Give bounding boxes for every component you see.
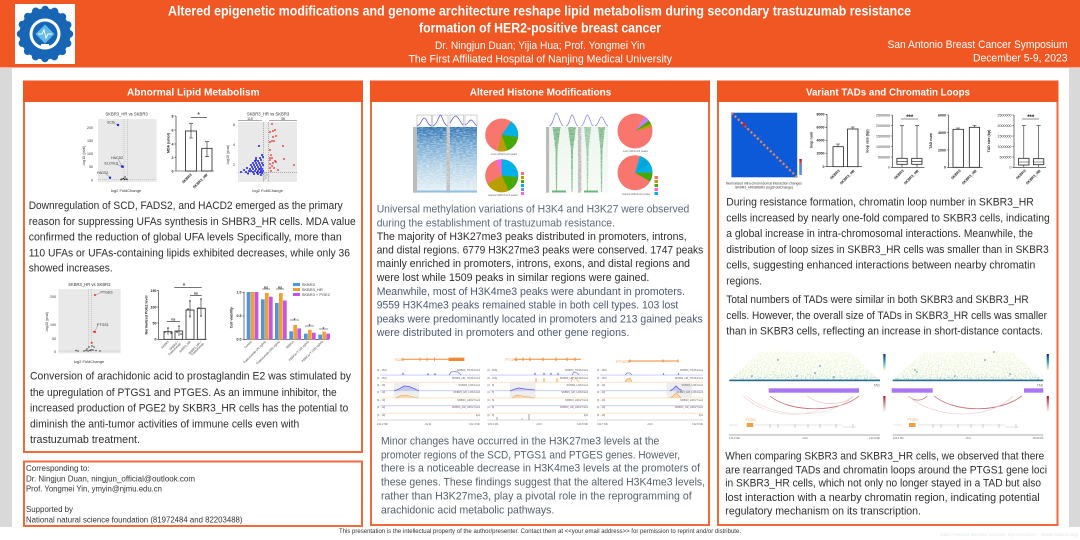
box plot: TAD size: 2000000 (998, 124, 1012, 128)
volcano plot: UFA lipids: -log10 (pval) (226, 145, 230, 165)
text block: methylation variations: Universal methylation variations of H3K4 and H3K27 were observed (377, 204, 689, 216)
volcano plot: lipid genes: 200 (87, 126, 93, 130)
text block: prostaglandin: Conversion of arachidonic acid to prostaglandin E2 was stimulated by (30, 371, 351, 383)
panel: variant TADs and chromatin loops (717, 80, 1058, 525)
track column: PTGES: SKBR3_HR_TR4K4me3 (675, 376, 704, 380)
bar chart: loop number (809, 112, 862, 185)
text block: loop numbers: During resistance formation, chromatin loop number in SKBR3_HR (726, 196, 1034, 208)
volcano plot: UFA lipids: 2 (233, 163, 235, 167)
volcano plot: PTGS genes: log2 FoldChange (74, 359, 105, 364)
bar chart: cell viability: Cell viability (230, 307, 234, 328)
volcano plot: UFA lipids: 110 (247, 117, 253, 121)
bar chart: cell viability: * (323, 327, 325, 333)
bar chart: MDA: 2 (172, 156, 174, 160)
text block: prostaglandin (30, 371, 351, 446)
footer disclaimer: This presentation is the intellectual property of the author/presenter. Contact them at <<your email address>> for permission to reprint and/or distribute. (339, 528, 741, 535)
pie: gained H3K4me3: Gained H3K4me3 peaks (622, 192, 651, 196)
text block: methylation variations: mainly enriched in promoters, introns, exons, and distal regions and (377, 258, 690, 270)
box plot: TAD size: 2500000 (998, 113, 1012, 117)
Hi-C map: SKBR3_HR: 133.8 Mb (1032, 436, 1044, 440)
volcano plot: lipid genes: HACD2 (111, 156, 123, 160)
bar chart: PGE2 level: SKBR3 + (168, 340, 180, 351)
track column: PTGS1: IgG (584, 413, 588, 417)
text block: methylation variations (376, 204, 704, 339)
track column: SCD: SKBR3_H3K4me3 (459, 383, 481, 387)
Hi-C map: SKBR3: 133.8 Mb (869, 436, 881, 440)
volcano plot: lipid genes: 150 (87, 139, 93, 143)
text block: prostaglandin: diminish the anti-tumor activities of immune cells even with (30, 418, 299, 430)
panel: contacts and funding: Prof. Yongmei Yin, ymyin@njmu.edu.cn (26, 485, 162, 494)
bar chart: TAD number: 0 (944, 166, 946, 170)
panel: contacts and funding: Corresponding to: (26, 464, 90, 473)
text block: methylation variations: Meanwhile, most of H3K4me3 peaks were abundant in promoters. (377, 286, 685, 298)
track column: SCD: [0 - 10] (377, 390, 385, 394)
track column: SCD: [0 - 150] (377, 368, 387, 372)
track column: PTGES: [0 - 10] (597, 405, 605, 409)
track column: PTGS1 (487, 357, 589, 426)
volcano plot: lipid genes: -log10 (pval) (82, 146, 86, 166)
track column: PTGES: 132.8 Mb (692, 422, 704, 426)
track column: SCD: [0 - 150] (377, 376, 387, 380)
panel: contacts and funding (24, 462, 362, 526)
text block: methylation variations: peaks were predominantly located in promoters and 213 gained peaks (377, 314, 703, 326)
conference and date: December 5-9, 2023 (973, 52, 1068, 64)
heading: variant TADs: Variant TADs and Chromatin Loops (806, 86, 970, 98)
text block: lipid desaturation (29, 200, 356, 275)
track column: PTGES: [0 - 10] (597, 413, 605, 417)
track column: PTGES: [0 - 150] (597, 368, 607, 372)
track column: PTGES: 132.7 Mb (597, 422, 608, 426)
Hi-C map: SKBR3_HR: PTGS1 (908, 418, 918, 422)
panel: contacts and funding: Supported by (26, 505, 73, 514)
bar chart: PGE2 level: ns (171, 318, 175, 322)
title (168, 4, 911, 36)
text block: loop numbers: Total numbers of TADs were similar in both SKBR3 and SKBR3_HR (726, 294, 1029, 306)
box plot: TAD size: 0 (1010, 166, 1012, 170)
pie: gained peaks: Gained H3K27me3 peaks (488, 193, 518, 197)
contact heatmap: SKBR3_HR/SKBR3 (log2FoldChange) (735, 186, 793, 190)
track column: PTGS1: SKBR3_HR_H3K27me3 (560, 405, 589, 409)
logo (15, 4, 75, 64)
Hi-C map: SKBR3 (729, 352, 886, 440)
box plot: TAD size: 1500000 (998, 134, 1012, 138)
header banner (0, 0, 1080, 68)
contact heatmap: Normalized intra-chromosomal interaction changes (726, 181, 802, 185)
bar chart: loop number: loop num (809, 132, 813, 148)
bar chart: PGE2 level: Trastuzumab (190, 342, 205, 357)
box plot: loop size: 1000000 (876, 145, 890, 149)
track column: SCD: SCD (395, 357, 404, 362)
box plot: loop size: *** (906, 115, 914, 121)
track column: SCD: chr10 (425, 422, 432, 426)
box plot: loop size: loop size (bp) (865, 129, 869, 153)
track column: PTGES: SKBR3_TR4K4me3 (680, 368, 704, 372)
bar chart: MDA: MDA (umol) (167, 132, 171, 153)
authors and affiliation: Dr. Ningjun Duan; Yijia Hua; Prof. Yongmei Yin (435, 40, 645, 52)
panel: contacts and funding: National natural science foundation (81972484 and 82203488) (26, 516, 243, 524)
bar chart: PGE2 level: Trastuzumab (167, 342, 182, 357)
panel: contacts and funding: Dr. Ningjun Duan, ningjun_official@outlook.com (26, 474, 195, 484)
pie charts: H3K4me3 (618, 114, 658, 196)
bar chart: TAD number (929, 113, 983, 185)
track column: PTGS1: [0 - 150] (488, 376, 497, 380)
track column: PTGS1: SKBR3_TR4K4me3 (565, 368, 589, 372)
Hi-C map: SKBR3: PTGS1 (746, 418, 756, 422)
track column: SCD: IgG (476, 413, 480, 417)
volcano plot: PTGS genes: PTGS1 (97, 323, 109, 327)
track column: PTGES: [0 - 150] (597, 376, 607, 380)
Hi-C map: SKBR3_HR (892, 352, 1049, 440)
bar chart: PGE2 level (145, 283, 207, 357)
authors and affiliation: The First Affiliated Hospital of Nanjing Medical University (408, 54, 672, 66)
legend: cell viability (293, 282, 331, 297)
bar chart: loop number: 0 (822, 165, 824, 169)
bar chart: MDA: 8 (172, 114, 174, 118)
text block: promoter changes: there is a noticeable decrease in H3K4me3 levels at the promoters of (381, 463, 701, 475)
bar chart: PGE2 level: SKBR3 (160, 340, 170, 349)
volcano plot: lipid genes: 50 (89, 165, 93, 169)
panel: altered histone modifications (370, 80, 710, 525)
legend: H3K4me3 (654, 176, 658, 195)
text block: methylation variations: The majority of H3K27me3 peaks distributed in promoters, introns, (377, 231, 687, 243)
track column: PTGES: [0 - 10] (597, 398, 605, 402)
text block: rearranged TADs (725, 450, 1047, 517)
box plot: loop size: 2500000 (876, 113, 890, 117)
text block: loop numbers: a global increase in intra-chromosomal interactions. Meanwhile, the (726, 228, 1033, 240)
box plot: loop size: 500000 (878, 155, 890, 159)
bar chart: cell viability: ns (264, 285, 268, 289)
bar chart: cell viability: PBMCs+T (100 ug/ml) (301, 340, 324, 363)
bar chart: cell viability: Trastuzumab (20 ug/ml) (242, 340, 267, 364)
box plot: loop size: SKBR3 (893, 169, 905, 180)
bar chart: loop number: SKBR3 (829, 169, 841, 180)
track column: SCD: SKBR3_HR_H3K4me3 (453, 390, 481, 394)
track column: SCD: 102.2 Mb (377, 422, 388, 426)
bar chart: cell viability: PBMCs+T (20 ug/ml) (288, 340, 310, 362)
bar chart: cell viability: 0.0 (236, 338, 242, 342)
text block: promoter changes: promoter regions of the SCD, PTGS1 and PTGES genes. However, (381, 449, 680, 461)
track column: PTGES: [0 - 10] (597, 383, 605, 387)
authors and affiliation (408, 40, 672, 66)
legend: cell viability: SKBR3 (302, 282, 316, 287)
volcano plot: UFA lipids: 36 (281, 117, 285, 121)
bar chart: PGE2 level: Normalized PGE2 level (145, 296, 149, 334)
track column: SCD: [0 - 10] (377, 383, 385, 387)
footer watermark: San Antonio Breast Cancer Symposium - www.sabcs.org (940, 532, 1079, 537)
track column: PTGS1: SKBR3_H3K4me3 (567, 383, 589, 387)
bar chart: TAD number: TAD num (929, 133, 933, 149)
volcano plot: lipid genes: 0 (91, 178, 93, 182)
volcano plot: lipid genes: ELOVL6 (104, 162, 118, 166)
volcano plot: lipid genes (82, 112, 156, 193)
box plot: TAD size: *** (1027, 115, 1035, 121)
text block: rearranged TADs: are rearranged TADs and chromatin loops around the PTGS1 gene loci (725, 465, 1047, 477)
text block: rearranged TADs: in SKBR3_HR cells, which not only no longer stayed in a TAD but also (725, 478, 1041, 490)
title: Altered epigenetic modifications and genome architecture reshape lipid metabolism during secondary trastuzumab resistance (168, 4, 911, 18)
text block: loop numbers: cells. However, the overall size of TADs in SKBR3_HR cells was smaller (726, 310, 1047, 322)
text block: prostaglandin: increased production of PGE2 by SKBR3_HR cells has the potential to (30, 403, 348, 415)
volcano plot: PTGS genes: 200 (50, 295, 56, 299)
conference and date (888, 39, 1068, 64)
track column: SCD (377, 357, 481, 426)
box plot: loop size: SKBR3_HR (903, 169, 920, 185)
track column: PTGS1: [0 - 5] (488, 398, 494, 402)
track column: PTGS1: 133.5 Mb (577, 422, 589, 426)
bar chart: PGE2 level: 0 (154, 338, 156, 342)
text block: loop numbers (726, 196, 1050, 338)
track column: PTGES: SKBR3_HR_H3K27me3 (675, 405, 704, 409)
box plot: loop size: 2000000 (876, 124, 890, 128)
box plot: loop size: 0 (888, 166, 890, 170)
side strip right (1069, 68, 1080, 527)
bar chart: PGE2 level: ns (194, 292, 198, 296)
bar chart: cell viability: PBMCs (285, 339, 295, 350)
conference and date: San Antonio Breast Cancer Symposium (888, 39, 1068, 51)
bar chart: TAD number: 6000 (938, 113, 946, 117)
box plot: TAD size: SKBR3_HR (1025, 169, 1042, 185)
track column: PTGES: PTGES (616, 359, 630, 364)
text block: loop numbers: regions. (726, 275, 762, 287)
heatmaps: H3K4me3 (546, 113, 608, 193)
volcano plot: PTGS genes: PTGES (100, 290, 113, 294)
bar chart: TAD number: SKBR3_HR (961, 169, 978, 185)
text block: loop numbers: distribution of loop sizes in SKBR3_HR cells was smaller than in SKBR3 (726, 244, 1049, 256)
Hi-C map: SKBR3_HR: TAD (1037, 384, 1044, 388)
title: formation of HER2-positive breast cancer (419, 20, 662, 36)
track column: PTGS1: [0 - 5] (488, 390, 494, 394)
track column: PTGES: SKBR3_H3K27me3 (680, 398, 704, 402)
track column: SCD: [0 - 10] (377, 413, 385, 417)
track column: SCD: [0 - 10] (377, 398, 385, 402)
bar chart: cell viability: ns (278, 285, 282, 289)
track column: SCD: SKBR3_HR_H3K27me3 (452, 405, 481, 409)
bar chart: PGE2 level: * (183, 283, 186, 290)
volcano plot: PTGS genes: -log10 (pval) (45, 312, 49, 332)
box plot: TAD size (987, 113, 1046, 185)
bar chart: cell viability: 1.0 (236, 290, 242, 294)
volcano plot: UFA lipids: SKBR3_HR vs SKBR3 (247, 112, 290, 116)
Hi-C map: SKBR3: 133.3 Mb (729, 436, 740, 440)
genome browser tracks (377, 357, 704, 426)
text block: methylation variations: were lost while 1509 peaks in similar regions were gained. (376, 272, 649, 284)
bar chart: loop number: 2000 (816, 152, 824, 156)
box plot: loop size (865, 113, 924, 185)
volcano plot: PTGS genes: SKBR3_HR vs SKBR3 (68, 282, 111, 287)
volcano plot: lipid genes: SKBR3_HR vs SKBR3 (105, 112, 148, 116)
bar chart: MDA: SKBR3_HR (192, 173, 209, 189)
text block: methylation variations: and distal regions. 6779 H3K27me3 peaks were conserved. 1747 peaks (377, 244, 704, 256)
text block: promoter changes (381, 435, 705, 516)
bar chart: cell viability: Control (243, 340, 253, 349)
text block: promoter changes: arachidonic acid metabolic pathways. (381, 504, 554, 516)
bar chart: loop number: 6000 (816, 126, 824, 130)
text block: methylation variations: were distributed in promoters and other gene regions. (376, 327, 629, 339)
bar chart: loop number: 8000 (816, 112, 824, 116)
volcano plot: lipid genes: log2 FoldChange (111, 188, 142, 193)
track column: PTGES: SKBR3_HR_H3K4me3 (676, 390, 704, 394)
box plot: TAD size: 500000 (1000, 155, 1012, 159)
text block: promoter changes: rather than H3K27me3, play a pivotal role in the reprogramming of (381, 490, 693, 502)
bar chart: cell viability: Trastuzumab (100 ug/ml) (255, 340, 281, 365)
bar chart: cell viability: * (309, 324, 311, 330)
text block: lipid desaturation: confirmed the reduction of global UFA levels Specifically, more than (29, 232, 342, 244)
text block: loop numbers: cells, suggesting enhanced interactions between nearby chromatin (726, 260, 1035, 272)
bar chart: PGE2 level: SKBR3_HR (178, 340, 192, 354)
volcano plot: UFA lipids: 6 (233, 123, 235, 127)
track column: SCD: [0 - 10] (377, 405, 385, 409)
volcano plot: UFA lipids (226, 112, 297, 193)
volcano plot: UFA lipids: 4 (233, 143, 235, 147)
bar chart: PGE2 level: SKBR3_HR + (187, 340, 203, 355)
track column: PTGES (597, 359, 704, 426)
bar chart: cell viability: 0.5 (236, 314, 242, 318)
text block: lipid desaturation: Downregulation of SCD, FADS2, and HACD2 emerged as the primary (29, 200, 343, 212)
box plot: TAD size: 1000000 (998, 145, 1012, 149)
text block: methylation variations: during the establishment of trastuzumab resistance. (377, 218, 615, 230)
bar chart: cell viability (230, 282, 331, 365)
track column: PTGES: IgG (699, 413, 703, 417)
bar chart: MDA: * (197, 112, 200, 119)
track column: PTGS1: SKBR3_HR_TR4K4me3 (560, 376, 589, 380)
track column: PTGES: SKBR3_H3K4me3 (682, 383, 704, 387)
text block: loop numbers: cells increased by nearly one-fold compared to SKBR3 cells, indicating (726, 212, 1050, 224)
track column: PTGS1: PTGS1 (505, 357, 519, 362)
volcano plot: PTGS genes: 0 (54, 350, 56, 354)
bar chart: TAD number: SKBR3 (950, 169, 962, 180)
track column: PTGS1: [0 - 5] (488, 405, 494, 409)
bar chart: MDA (167, 112, 214, 189)
pie: lost H3K4me3: Lost H3K4me3 peaks (623, 149, 649, 153)
panel: abnormal lipid metabolism (23, 80, 363, 452)
contact heatmap (726, 113, 802, 190)
track column: PTGS1: SKBR3_HR_H3K4me3 (561, 390, 589, 394)
track column: PTGS1: [0 - 5] (488, 413, 494, 417)
box plot: TAD size: TAD size (bp) (987, 129, 991, 152)
bar chart: MDA: SKBR3 (181, 173, 193, 184)
heading: altered histone modifications: Altered Histone Modifications (470, 86, 612, 98)
bar chart: PGE2 level: 150 (150, 289, 156, 293)
heading: abnormal lipid metabolism: Abnormal Lipid Metabolism (127, 86, 260, 98)
text block: lipid desaturation: 110 UFAs or UFAs-containing lipids exhibited decreases, while only 36 (29, 247, 350, 259)
text block: rearranged TADs: regulatory mechanism on its transcription. (725, 505, 921, 517)
text block: loop numbers: than in SKBR3 cells, reflecting an increase in short-distance contacts. (726, 326, 1043, 338)
pie charts: H3K27me3 (485, 118, 524, 197)
volcano plot: PTGS genes: 100 (50, 323, 56, 327)
bar chart: loop number: 4000 (816, 139, 824, 143)
legend: pie (521, 172, 524, 195)
volcano plot: UFA lipids: log2 FoldChange (252, 188, 284, 193)
text block: promoter changes: Minor changes have occurred in the H3K27me3 levels at the (381, 435, 659, 447)
bar chart: MDA: 4 (172, 142, 174, 146)
text block: lipid desaturation: reason for suppressing UFAs synthesis in SHBR3_HR cells. MDA value (29, 216, 356, 228)
track column: SCD: SKBR3_TR4K4me3 (457, 368, 481, 372)
track column: PTGES: [0 - 10] (597, 390, 605, 394)
pie: lost peaks: Lost H3K27me3 peaks (491, 152, 518, 156)
Hi-C map: SKBR3: chr9 (802, 436, 808, 440)
track column: PTGS1: [0 - 5] (488, 383, 494, 387)
box plot: loop size: 1500000 (876, 134, 890, 138)
bar chart: PGE2 level: 100 (150, 305, 156, 309)
bar chart: PGE2 level: 50 (152, 321, 156, 325)
text block: rearranged TADs: lost interaction with a nearby chromatin region, indicating potential (725, 492, 1040, 504)
text block: prostaglandin: trastuzumab treatment. (30, 434, 140, 446)
text block: rearranged TADs: When comparing SKBR3 and SKBR3_HR cells, we observed that there (725, 450, 1044, 462)
heatmaps: H3K27me3 (413, 115, 477, 193)
bar chart: TAD number: 2000 (938, 148, 946, 152)
track column: SCD: 102.3 Mb (469, 422, 481, 426)
text block: prostaglandin: the upregulation of PTGS1 and PTGES. As an immune inhibitor, the (30, 387, 337, 399)
text block: lipid desaturation: showed increases. (29, 263, 113, 275)
bar chart: loop number: SKBR3_HR (839, 169, 856, 185)
Hi-C map: SKBR3_HR: 133.3 Mb (893, 436, 904, 440)
track column: PTGS1: [0 - 150] (488, 368, 497, 372)
track column: SCD: SKBR3_HR_TR4K4me3 (452, 376, 481, 380)
volcano plot: lipid genes: 100 (87, 152, 93, 156)
bar chart: MDA: 6 (172, 128, 174, 132)
text block: promoter changes: these genes. These findings suggest that the altered H3K4me3 levels, (381, 476, 705, 488)
volcano plot: PTGS genes (45, 282, 121, 364)
box plot: TAD size: SKBR3 (1015, 169, 1027, 180)
text block: methylation variations: 9559 H3K4me3 peaks remained stable in both cell types. 103 lost (377, 300, 678, 312)
bar chart: cell viability: * (294, 318, 296, 324)
track column: PTGS1: chr9 (536, 422, 542, 426)
track column: PTGS1: 133.4 Mb (488, 422, 499, 426)
volcano plot: PTGS genes: 50 (52, 337, 56, 341)
track column: SCD: SKBR3_H3K27me3 (457, 398, 481, 402)
side strip left (0, 68, 12, 527)
volcano plot: lipid genes: FADS2 (97, 171, 108, 175)
volcano plot: lipid genes: SCD (107, 120, 115, 124)
legend: cell viability: SKBR3 + PGE2 (302, 292, 331, 297)
legend: cell viability: SKBR3_HR (302, 287, 323, 292)
track column: PTGES: chr9 (647, 422, 653, 426)
bar chart: MDA: 0 (172, 169, 174, 173)
Hi-C map: SKBR3_HR: chr9 (965, 436, 971, 440)
Hi-C map: SKBR3: TAD (874, 384, 880, 388)
track column: PTGS1: SKBR3_H3K27me3 (565, 398, 589, 402)
bar chart: TAD number: 4000 (938, 131, 946, 135)
